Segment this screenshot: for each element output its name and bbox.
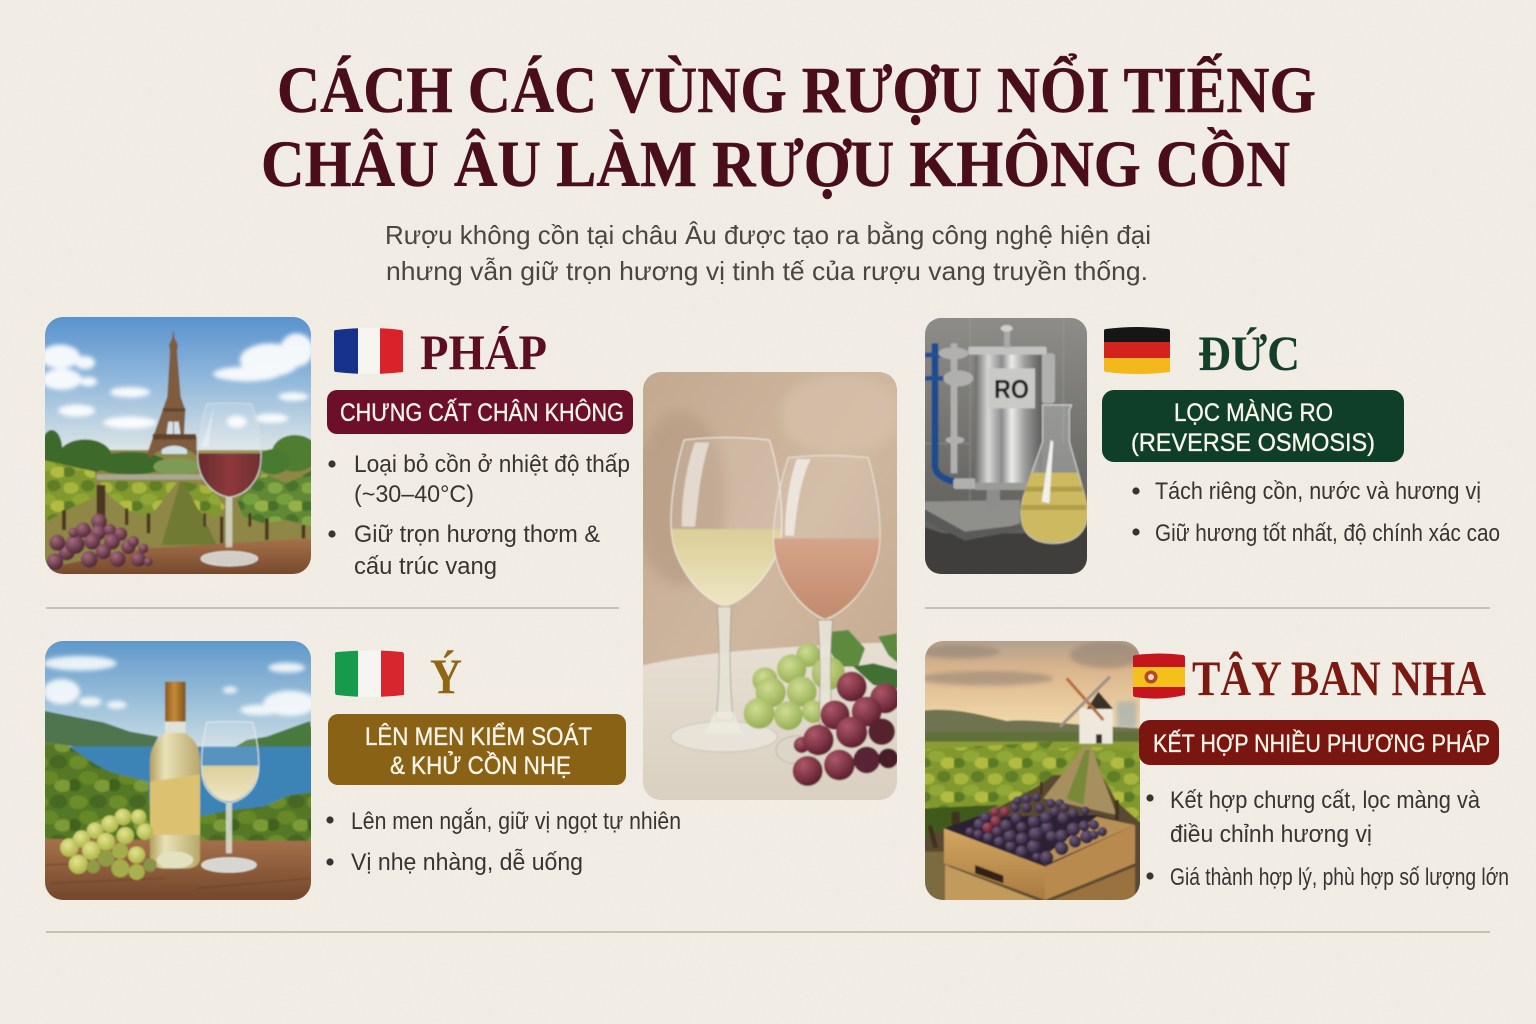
flag: Spain bbox=[1133, 654, 1185, 699]
method badge: Italy: LÊN MEN KIỂM SOÁT bbox=[365, 722, 592, 751]
bullet list: France bbox=[328, 451, 630, 580]
method badge: Italy: & KHỬ CỒN NHẸ bbox=[390, 750, 571, 780]
method badge: Germany bbox=[1102, 390, 1404, 462]
bullet list: Spain: Kết hợp chưng cất, lọc màng và bbox=[1170, 787, 1481, 814]
photo: windmill, vineyard and grape crate bbox=[920, 635, 1143, 908]
panel: Germany bbox=[920, 313, 1500, 580]
flag: Italy bbox=[335, 650, 404, 697]
bullet list: Italy: Lên men ngắn, giữ vị ngọt tự nhiên bbox=[351, 808, 681, 835]
bullet list: Italy: Vị nhẹ nhàng, dễ uống bbox=[351, 849, 583, 876]
bullet list: Germany: Tách riêng cồn, nước và hương vị bbox=[1155, 478, 1481, 505]
heading: France: PHÁP bbox=[420, 324, 547, 380]
heading: Spain: TÂY BAN NHA bbox=[1192, 650, 1486, 706]
method badge: France bbox=[327, 390, 633, 434]
method badge: Italy bbox=[328, 714, 626, 785]
title: CHÂU ÂU LÀM RƯỢU KHÔNG CỒN bbox=[261, 127, 1290, 201]
bullet list: France: Loại bỏ cồn ở nhiệt độ thấp bbox=[354, 451, 630, 478]
panel: Spain bbox=[920, 635, 1509, 908]
bullet list: Germany bbox=[1132, 478, 1500, 547]
title bbox=[261, 53, 1316, 201]
method badge: Spain bbox=[1139, 720, 1499, 765]
flag: France bbox=[334, 328, 403, 374]
bullet list: France: Giữ trọn hương thơm & bbox=[354, 521, 600, 548]
photo: Eiffel tower, vineyard and red wine bbox=[40, 313, 318, 580]
bullet list: France: cấu trúc vang bbox=[354, 553, 497, 580]
title: CÁCH CÁC VÙNG RƯỢU NỔI TIẾNG bbox=[277, 53, 1316, 127]
bullet list: Spain bbox=[1146, 787, 1509, 891]
panel: France bbox=[40, 313, 633, 580]
subtitle: Rượu không cồn tại châu Âu được tạo ra bằng công nghệ hiện đại bbox=[385, 220, 1151, 250]
method badge: Germany: LỌC MÀNG RO bbox=[1174, 398, 1333, 427]
subtitle: nhưng vẫn giữ trọn hương vị tinh tế của rượu vang truyền thống. bbox=[386, 256, 1148, 286]
heading: Germany: ĐỨC bbox=[1198, 325, 1300, 381]
photo: white wine bottle, glass and sea bbox=[40, 637, 317, 905]
subtitle bbox=[385, 220, 1151, 286]
method badge: Spain: KẾT HỢP NHIỀU PHƯƠNG PHÁP bbox=[1153, 729, 1490, 758]
photo: white and rosé wine glasses with grapes bbox=[643, 372, 897, 800]
photo: RO filtration tank and flask bbox=[925, 318, 1087, 574]
method badge: France: CHƯNG CẤT CHÂN KHÔNG bbox=[340, 398, 624, 427]
panel: Italy bbox=[40, 637, 681, 905]
bullet list: France: (~30–40°C) bbox=[354, 481, 474, 508]
photo: RO filtration tank and flask: RO bbox=[994, 374, 1029, 404]
flag: Germany bbox=[1104, 327, 1170, 374]
bullet list: Italy bbox=[326, 808, 681, 876]
heading: Italy: Ý bbox=[430, 648, 462, 704]
bullet list: Spain: điều chỉnh hương vị bbox=[1170, 821, 1372, 848]
method badge: Germany: (REVERSE OSMOSIS) bbox=[1131, 429, 1375, 457]
